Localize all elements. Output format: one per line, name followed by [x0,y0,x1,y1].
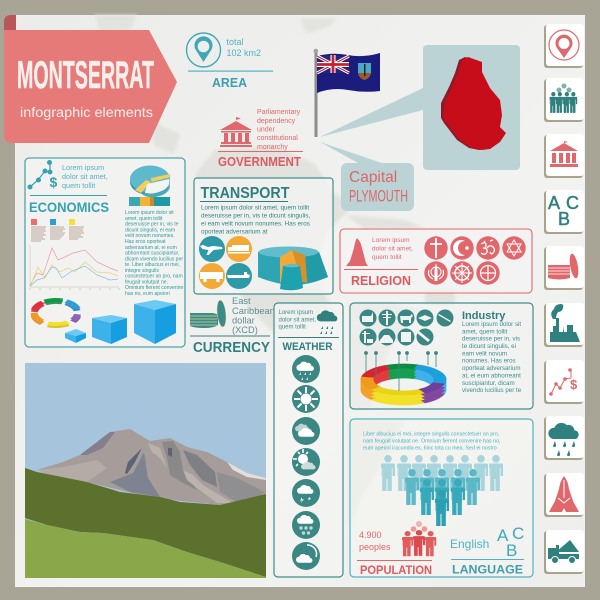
icon: star of David [502,236,526,260]
language value: English [450,537,489,551]
mountain landscape [25,363,266,578]
card: alphabet: B [558,209,570,229]
panel: weather [274,303,343,577]
economics body text: deseruisse per in, vis te [125,222,179,228]
icon: coins [190,300,227,328]
economics body text: dicunt singulis, ei eam [125,228,175,234]
line chart legend [31,219,84,241]
card: factory [544,303,584,347]
card: dump truck [544,530,584,574]
icon: crescent [450,236,474,260]
world map background [95,15,455,530]
economics body text: Omnium fierent convenire [125,285,183,291]
transport text: ei eam velit novum nonumes. Has eros [201,220,310,228]
area heading: AREA [212,76,247,90]
area value: total [226,37,244,47]
economics body text: velit novum nonumes. [125,233,175,239]
population text: Liber albucius ei mei, integre singulis consectetuer an pro, [363,432,499,438]
icon: language letters: C [512,524,524,543]
card: growth: $ [570,377,578,392]
industry text: nonumes. Has eros [462,358,516,365]
economics body text: feugait volutpat ne. [125,279,168,285]
3D ring chart [367,366,440,403]
economics body text: integre singulis [125,268,159,274]
capital label: Capital [349,169,397,186]
icon: growth and dollar: $ [50,174,58,190]
weather intro text: quem tollit [278,325,306,331]
population value: 4.900 [359,530,382,540]
transport heading: TRANSPORT [200,185,290,202]
card: alphabet: A [548,193,560,213]
icon: map pin [186,33,220,67]
religion heading: RELIGION [351,274,411,288]
segmented ring chart [34,300,78,326]
economics intro text: dolor sit amet, [62,172,108,181]
title ribbon [4,15,177,143]
panel: economics [25,158,185,347]
population text: nam feugait volutpat ne. Omnium fierent convenire has no, [363,438,501,444]
icon: dharma wheel [450,261,474,285]
card: people [544,78,584,122]
icon: thunderstorm [292,479,320,507]
icon: rain [292,355,320,383]
industry heading: Industry [462,310,506,322]
3D boxes chart [65,300,176,344]
industry text: Lorem ipsum dolor sit [462,321,521,328]
government description: Parliamentary [257,109,301,116]
government heading: GOVERNMENT [218,155,301,169]
industry text: te dicunt singulis, ei [462,343,516,350]
industry text: deseruisse per in, vis [462,336,520,343]
icon: clouds [292,417,320,445]
transport text: oporteat adversarium at [201,228,268,236]
icon: language letters: B [506,541,517,560]
icon: language letters: A [497,526,509,545]
card: government [544,134,584,178]
icon: ship [226,263,252,289]
religion text: dolor sit amet, [372,246,413,252]
population text: eum apeiori iracundia ex, hinc tota cu mea. Sed ei nostro [363,446,497,452]
economics body text: adversarium at, ei eum [125,245,177,251]
economics body text: dicam vivendo lucilius per [125,256,183,262]
pie chart [130,166,170,197]
line chart [30,245,119,290]
government description: constitutional [257,135,298,142]
area value: 102 km2 [226,48,261,58]
government description: dependency [257,118,296,125]
weather intro text: Lorem ipsum [278,310,313,316]
people pyramid [381,455,503,526]
card: coins [544,246,584,290]
sidebar icon cards [544,24,584,574]
title: MONTSERRAT [17,54,154,97]
currency description: East [232,296,251,306]
panel: religion [340,229,532,293]
currency block [190,296,275,356]
currency description: Caribbean [232,306,275,316]
economics intro text: quem tollit [62,181,95,190]
economics body text: Lorem ipsum dolor sit [125,210,174,216]
panel: industry [350,303,533,409]
industry icons [360,310,454,346]
icon: om [476,236,500,260]
icon: red people group [402,521,436,556]
religion text: Lorem ipsum [372,237,410,244]
industry text: at, ei eum abhorreant [462,372,521,380]
economics intro text: Lorem ipsum [62,163,104,172]
icon: night cloud [292,542,320,570]
card: praying hands [544,473,584,517]
industry text: amet, quem tollit [462,328,508,335]
icon: plane [199,236,225,262]
transport text: deseruisse per in, vis te dicunt singulis, [201,212,310,220]
transport text: Lorem ipsum dolor sit amet, quem tollit [201,204,309,212]
government description: monarchy [257,144,288,151]
economics body text: has no, eum apeiori [125,291,170,297]
ring chart pins [364,352,438,391]
icon: khanda [424,261,448,285]
capital callout [320,142,414,211]
economics body text: abhorreant suscipiantur, [125,250,179,256]
icon: cross [424,236,448,260]
capital name: PLYMOUTH [349,186,408,206]
area block [186,33,273,90]
industry text: oporteat adversarium [462,365,520,372]
religion text: quem tollit [372,254,402,261]
pie legend bar [129,197,170,206]
icon: rain cloud [317,310,337,334]
weather intro text: dolor sit amet, [278,317,317,323]
economics body text: Has eros oporteat [125,239,166,245]
icon: praying hands [346,238,368,266]
icon: bus [226,236,252,262]
map callout [320,45,520,170]
economics body text: amet, quem tollit [125,216,163,222]
subtitle: infographic elements [20,105,153,120]
industry text: suscipiantur, dicam [462,380,515,387]
economics heading: ECONOMICS [29,200,109,215]
currency description: (XCD) [232,325,258,335]
population heading: POPULATION [360,565,432,577]
language heading: LANGUAGE [452,564,523,576]
card: alphabet [544,190,584,234]
icon: sun behind cloud [292,448,320,476]
government block [218,109,303,169]
panel: transport [194,178,333,294]
icon: snow [292,511,320,539]
3D drum chart [258,246,328,290]
industry text: eam velit novum [462,350,507,357]
card: alphabet: C [566,193,579,213]
currency heading: CURRENCY [193,340,270,356]
panel: population and language [350,419,533,577]
industry text: vivendo lucilius per te [462,387,522,394]
map: Montserrat [441,57,506,150]
currency description: dollar [232,316,255,326]
economics body text: te. Liber albucius ei mei, [125,262,180,268]
government description: under [257,126,276,134]
card: location [544,24,584,68]
icon: sun [292,385,320,413]
icon: government building [220,113,252,147]
icon: circled cross [476,261,500,285]
economics body text: consectetuer an pro, nam [125,274,183,280]
icon: growth and dollar [28,160,58,190]
population value: peoples [359,542,391,552]
card: rain [544,416,584,460]
flag [314,49,380,137]
card: growth [544,360,584,404]
weather heading: WEATHER [282,341,333,353]
icon: truck [199,263,225,289]
